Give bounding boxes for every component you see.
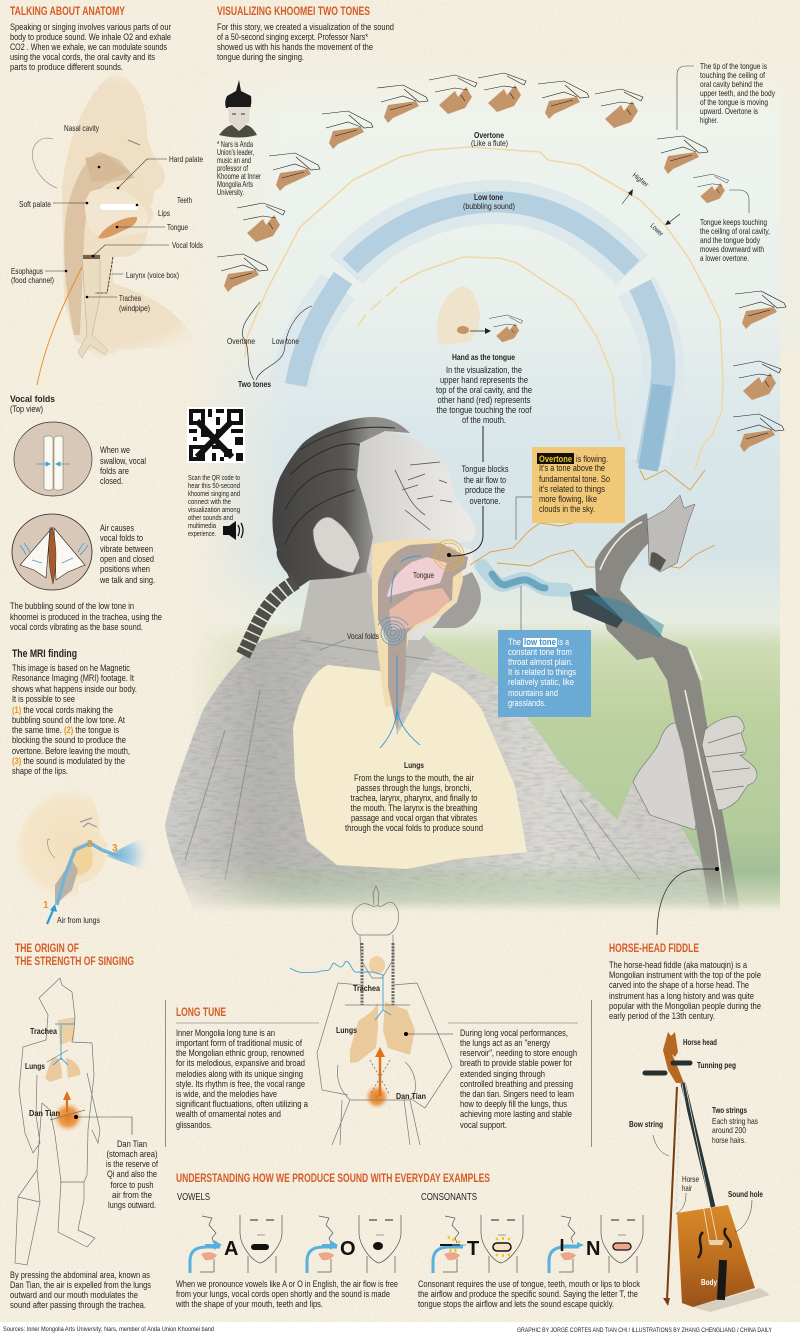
consonants subheading: CONSONANTS <box>421 1192 477 1203</box>
orange pointer to vocal folds <box>37 267 82 385</box>
MRI labels: Air from lungs <box>57 915 100 925</box>
higher / lower markers: Higher <box>631 172 650 189</box>
icon: letter O: O <box>340 1238 356 1260</box>
panel: low tone: low tone <box>524 637 556 648</box>
open text: vibrate between <box>100 544 153 555</box>
MRI text: (3) the sound is modulated by the <box>12 756 125 767</box>
section: the MRI finding <box>12 648 150 925</box>
icon: speaker <box>223 521 243 540</box>
labels inside cutaway: Tongue <box>413 570 434 580</box>
QR code <box>187 407 245 463</box>
footnote on Nars: University. <box>217 187 244 197</box>
lungs text <box>345 760 483 834</box>
intro text <box>217 22 394 63</box>
callout: tongue tip: and the tongue body <box>700 235 761 245</box>
fiddle text: carved into the shape of a horse head. The <box>609 980 749 991</box>
fiddle shaft <box>595 513 740 910</box>
anatomy labels and leader lines: Nasal cavity <box>64 123 100 133</box>
callout: tongue tip: oral cavity behind the <box>700 79 763 89</box>
vowels text: When we pronounce vowels like A or O in English, the air flow is free <box>176 1279 398 1290</box>
QR code block <box>187 407 245 540</box>
icon: letter N: N <box>586 1238 600 1260</box>
MRI text: bubbling sound of the low tone. At <box>12 715 125 726</box>
panel: low tone: relatively static, like <box>508 677 574 688</box>
panel: low tone: constant tone from <box>508 647 572 658</box>
panel: overtone: it's related to things <box>539 484 605 495</box>
long tune right text <box>460 1028 577 1131</box>
heading: (Top view) <box>10 404 43 415</box>
long tune right text: controlled breathing and pressing <box>460 1079 573 1090</box>
tongue blocks text: overtone. <box>470 496 500 507</box>
hand as the tongue: other hand (red) represents <box>438 395 531 406</box>
MRI text: blocking the sound to produce the <box>12 735 126 746</box>
footnote on Nars: music an and <box>217 155 251 165</box>
fiddle labels: around 200 <box>712 1125 746 1135</box>
section: long tune <box>166 886 592 1147</box>
fiddle text: instrument has a long history and was quite <box>609 991 754 1002</box>
overtone flow lines <box>470 470 715 568</box>
outer and inner overtone arcs <box>245 147 723 470</box>
throat cutaway <box>372 539 468 748</box>
ear <box>313 517 360 573</box>
figure labels: Trachea <box>353 983 380 993</box>
shaft highlight <box>600 522 725 905</box>
figure labels: Dan Tian <box>396 1091 426 1101</box>
footnote on Nars: Union's leader, <box>217 147 254 157</box>
heading and rules: LONG TUNE <box>176 1007 226 1019</box>
horse-head fiddle neck in illustration <box>570 495 757 910</box>
leaders for colored boxes <box>516 497 532 632</box>
hand as the tongue: of the mouth. <box>462 415 506 426</box>
tongue blocks text: Tongue blocks <box>462 464 509 475</box>
figure labels: Dan Tian <box>29 1108 60 1118</box>
vocal fold vibration rings <box>378 617 408 645</box>
closed text: When we <box>100 445 130 456</box>
callout: tongue tip: higher. <box>700 115 718 125</box>
open text: Air causes <box>100 523 134 534</box>
heading: TALKING ABOUT ANATOMY <box>10 6 125 18</box>
MRI labels: 1 <box>43 900 49 911</box>
heading: Vocal folds <box>10 394 55 405</box>
panel: overtone: It's a tone above the <box>539 463 605 474</box>
heading: UNDERSTANDING HOW WE PRODUCE SOUND WITH EVERYDAY EXAMPLES <box>176 1173 490 1185</box>
pressing text: Dan Tian, the air is expelled from the lungs <box>10 1280 151 1291</box>
open vocal folds diagram <box>12 514 92 590</box>
labels inside cutaway: Vocal folds <box>347 631 379 641</box>
anatomy labels and leader lines: Teeth <box>177 195 192 205</box>
standing figure <box>15 978 132 1265</box>
open text <box>99 523 155 586</box>
intro text: parts to produce different sounds. <box>10 62 123 73</box>
hand as the tongue <box>436 287 532 426</box>
fiddle pointer <box>657 869 717 935</box>
hand as the tongue: the tongue touching the roof <box>436 405 532 416</box>
tongue blocks text: the air flow to <box>464 475 506 486</box>
closed text: swallow, vocal <box>100 456 146 467</box>
low tone flow <box>482 566 566 590</box>
panel: low tone: It is related to things <box>508 667 576 678</box>
heading: The MRI finding <box>12 648 77 660</box>
callout: tongue tip: touching the ceiling of <box>700 70 766 80</box>
body <box>677 1205 755 1307</box>
footnote on Nars: professor of <box>217 163 248 173</box>
portrait of Nars <box>219 80 257 138</box>
panel: low tone: grasslands. <box>508 698 546 709</box>
intro text: For this story, we created a visualization of the sound <box>217 22 394 33</box>
pressing text: sound after passing through the trachea. <box>10 1300 146 1311</box>
hand as the tongue: In the visualization, the <box>446 365 522 376</box>
bubbling text <box>10 601 162 633</box>
dan tian text: Qi and also the <box>107 1169 157 1180</box>
dan tian text: Dan Tian <box>117 1139 147 1150</box>
anatomy labels and leader lines: (food channel) <box>11 275 54 285</box>
intro text: of a 50-second singing excerpt. Professor Nars* <box>217 32 368 43</box>
long tune left text: melodies along with its unique singing <box>176 1069 303 1080</box>
hair <box>272 417 410 590</box>
fiddle labels: Each string has <box>712 1116 758 1126</box>
MRI text: (1) the vocal cords making the <box>12 705 113 716</box>
vowels text <box>175 1279 398 1310</box>
pointers <box>653 1135 752 1232</box>
closed vocal folds diagram <box>14 422 92 496</box>
intro text: Speaking or singing involves various parts of our <box>10 22 172 33</box>
closed text <box>100 445 146 487</box>
figure labels: Lungs <box>336 1025 357 1035</box>
MRI text <box>12 663 137 777</box>
overtone and low tone labels: (Like a flute) <box>471 138 508 148</box>
panel: low tone: throat almost plain. <box>508 657 573 668</box>
low tone arc <box>290 202 663 470</box>
sources: Sources: Inner Mongolia Arts University; Nars, member of Anda Union Khoomei band <box>3 1326 214 1333</box>
fiddle shadow <box>693 1288 770 1312</box>
heading <box>15 943 134 968</box>
QR caption: other sounds and <box>188 513 233 522</box>
central figure <box>290 886 453 1145</box>
dan tian text <box>106 1139 158 1211</box>
footer strip <box>0 1322 800 1334</box>
anatomy labels and leader lines: Tongue <box>167 222 188 232</box>
face <box>357 430 481 640</box>
long tune left text: important form of traditional music of <box>176 1038 302 1049</box>
fiddle labels: Bow string <box>629 1119 663 1129</box>
panel: overtone: more flowing, like <box>539 494 597 505</box>
long tune left text: for its melodious, expansive and broad <box>176 1058 305 1069</box>
panel: overtone: is flowing. <box>576 454 608 465</box>
lungs text: passes through the lungs, bronchi, <box>356 783 472 794</box>
section: vocal folds <box>10 394 162 633</box>
open text: vocal folds to <box>100 533 143 544</box>
QR caption <box>188 473 240 538</box>
figure labels <box>336 983 426 1101</box>
consonants text: the airflow and produce the specific sound. Saying the letter T, the <box>418 1289 638 1300</box>
fiddle text: The horse-head fiddle (aka matouqin) is a <box>609 960 748 971</box>
callout: tongue tip: of the tongue is moving <box>700 97 768 107</box>
sound holes, bridge and tailpiece <box>698 1228 731 1258</box>
horse head <box>647 495 695 572</box>
anatomy labels and leader lines <box>11 123 203 313</box>
figure labels: Trachea <box>30 1026 57 1036</box>
lungs text: trachea, larynx, pharynx, and finally to <box>350 793 478 804</box>
lungs text: From the lungs to the mouth, the air <box>354 773 475 784</box>
intro text <box>10 22 172 73</box>
intro text: tongue during the singing. <box>217 52 304 63</box>
MRI labels <box>43 839 118 925</box>
overtone and low tone labels <box>463 130 515 211</box>
long tune right text: how to deeply fill the lungs, thus <box>460 1099 567 1110</box>
open text: we talk and sing. <box>99 575 155 586</box>
icon: letter T: T <box>467 1238 479 1260</box>
anatomy head illustration <box>32 74 198 360</box>
panel: low tone: mountains and <box>508 688 558 699</box>
callout: tongue tip <box>677 61 776 263</box>
consonants text: Consonant requires the use of tongue, teeth, mouth or lips to block <box>418 1279 640 1290</box>
fiddle labels: Two strings <box>712 1105 747 1115</box>
panel: low tone <box>498 630 591 717</box>
anatomy labels and leader lines: Hard palate <box>169 154 203 164</box>
callout: tongue tip: the ceiling of oral cavity, <box>700 226 770 236</box>
bubbling text: khoomei is produced in the trachea, using the <box>10 612 162 623</box>
panel: low tone: is a <box>558 637 569 648</box>
intro text: CO2 . When we exhale, we can modulate sounds <box>10 42 167 53</box>
labels inside cutaway <box>347 570 434 641</box>
overtone vibration rings <box>434 540 464 570</box>
long tune right text: breath to provide stable power for <box>460 1058 573 1069</box>
tongue <box>387 557 447 597</box>
callout: tongue tip: The tip of the tongue is <box>700 61 767 71</box>
long tune right text: vocal support. <box>460 1120 507 1131</box>
footnote on Nars: Mongolia Arts <box>217 179 253 189</box>
hand as the tongue: upper hand represents the <box>440 375 528 386</box>
QR caption: visualization among <box>188 505 240 514</box>
icon: letter N <box>549 1215 643 1273</box>
higher / lower markers <box>622 172 680 238</box>
heading <box>10 394 55 415</box>
overtone and low tone labels: Overtone <box>474 130 504 140</box>
long tune left text: the Mongolian ethnic group, renowned <box>176 1048 304 1059</box>
panel: overtone: Overtone <box>539 454 572 465</box>
anatomy labels and leader lines: Lips <box>158 208 170 218</box>
fiddle labels: Body <box>701 1277 717 1287</box>
hand as the tongue: top of the oral cavity, and the <box>436 385 532 396</box>
heading and rules <box>166 1000 592 1147</box>
vowels text: from your lungs, vocal cords open shortly and the sound is made <box>176 1289 390 1300</box>
pressing text: outward and our mouth modulates the <box>10 1290 138 1301</box>
footnote on Nars: Khoome at Inner <box>217 171 261 181</box>
closed text: folds are <box>100 466 129 477</box>
lungs text: passage and vocal organ that vibrates <box>351 813 477 824</box>
coat fold shading <box>185 640 640 880</box>
long tune right text: the dan tian. Singers need to learn <box>460 1089 574 1100</box>
callout: tongue tip: Tongue keeps touching <box>700 217 767 227</box>
pressing text: By pressing the abdominal area, known as <box>10 1270 150 1281</box>
fiddle labels: Horse head <box>683 1037 717 1047</box>
section: understanding how we produce sound <box>175 1173 643 1310</box>
fiddle labels: horse hairs. <box>712 1135 746 1145</box>
callout: tongue tip: a lower overtone. <box>700 253 749 263</box>
heading: HORSE-HEAD FIDDLE <box>609 943 699 955</box>
sky and grassland backdrop <box>170 50 800 915</box>
fiddle text <box>609 960 761 1022</box>
bubbling text: vocal cords vibrating as the base sound. <box>10 622 143 633</box>
fiddle labels: hair <box>682 1183 692 1193</box>
pegs <box>645 1063 690 1073</box>
higher / lower markers: Lower <box>649 222 665 238</box>
fiddle text: early period of the 13th century. <box>609 1011 715 1022</box>
open text: positions when <box>100 564 150 575</box>
fingers <box>702 717 757 810</box>
icon: letter T <box>433 1215 523 1273</box>
tongue blocks text: produce the <box>465 485 505 496</box>
two tones callout: Overtone <box>227 336 255 346</box>
icon: letter O <box>307 1215 401 1273</box>
lungs text: Lungs <box>404 760 424 770</box>
fiddle labels: Sound hole <box>728 1189 763 1199</box>
long tune left text: wealth of ornamental notes and <box>175 1109 281 1120</box>
two tones callout: Two tones <box>238 379 271 389</box>
MRI text: overtone. Before leaving the mouth, <box>12 746 130 757</box>
fiddle labels: Horse <box>682 1174 699 1184</box>
fiddle text: Mongolian instrument with the top of the pole <box>609 970 761 981</box>
long tune right text: extended singing through <box>460 1069 545 1080</box>
dan tian text: is the reserve of <box>106 1159 158 1170</box>
neck <box>300 540 436 690</box>
QR caption: experience. <box>188 529 216 538</box>
fiddle illustration <box>645 1032 770 1312</box>
anatomy labels and leader lines: Trachea <box>119 293 141 303</box>
head <box>663 1032 684 1083</box>
overtone and low tone labels: Low tone <box>474 192 503 202</box>
vowels text: with the shape of your mouth, teeth and lips. <box>175 1299 323 1310</box>
anatomy labels and leader lines: Vocal folds <box>172 240 203 250</box>
MRI text: This image is based on he Magnetic <box>12 663 130 674</box>
MRI text: the same time. (2) the tongue is <box>12 725 119 736</box>
MRI head illustration <box>15 789 150 924</box>
section: horse-head fiddle <box>609 943 770 1312</box>
dark block <box>570 588 623 628</box>
anatomy labels and leader lines: Esophagus <box>11 266 43 276</box>
long tune right text: the lungs act as an "energy <box>460 1038 550 1049</box>
fiddle text: popular with the Mongolian people during the <box>609 1001 761 1012</box>
QR caption: hear this 50-second <box>188 481 240 490</box>
vowels subheading: VOWELS <box>177 1192 210 1203</box>
intro text: using the vocal cords, the oral cavity and its <box>10 52 155 63</box>
footnote on Nars <box>217 139 261 197</box>
icon: letter A <box>190 1215 282 1273</box>
heading: THE ORIGIN OF <box>15 943 79 955</box>
QR caption: connect with the <box>188 497 231 506</box>
hair strands <box>285 427 395 545</box>
overtone and low tone labels: (bubbling sound) <box>463 201 515 211</box>
two tones callout: Low tone <box>272 336 299 346</box>
long tune left text: significant fluctuations, often utilizing a <box>176 1099 309 1110</box>
panel: overtone <box>532 447 625 523</box>
long tune left text: glissandos. <box>176 1120 212 1131</box>
air flow arrows <box>380 556 421 748</box>
figure labels <box>25 1026 60 1118</box>
QR caption: Scan the QR code to <box>188 473 240 482</box>
panel: overtone: fundamental tone. So <box>539 474 610 485</box>
MRI text: shape of the lips. <box>12 766 68 777</box>
thumb and cuff <box>633 723 700 830</box>
section: origin of the strength of singing <box>10 943 158 1311</box>
panel: low tone: The <box>508 637 521 648</box>
lungs overlay <box>293 665 527 869</box>
footnote on Nars: * Nars is Anda <box>217 139 253 149</box>
braid <box>243 582 296 655</box>
callout: tongue tip: upward. Overtone is <box>700 106 758 116</box>
closed text: closed. <box>100 476 123 487</box>
long tune right text: During long vocal performances, <box>460 1028 568 1039</box>
neck <box>683 1083 713 1207</box>
section: visualizing khoomei two tones <box>217 6 786 470</box>
beard <box>432 572 481 628</box>
section: talking about anatomy <box>10 6 203 385</box>
fiddle labels <box>629 1037 763 1287</box>
panel: overtone: clouds in the sky. <box>539 504 595 515</box>
long tune left text <box>175 1028 309 1131</box>
callout: tongue tip: moves downward with <box>700 244 764 254</box>
anatomy labels and leader lines: (windpipe) <box>119 303 150 313</box>
anatomy labels and leader lines: Larynx (voice box) <box>126 270 179 280</box>
tongue blocks text <box>462 464 509 507</box>
two tones callout <box>227 302 312 389</box>
eye and wrinkles <box>395 462 452 530</box>
hand as the tongue: Hand as the tongue <box>452 352 515 362</box>
MRI labels: 2 <box>87 839 93 850</box>
figure labels: Lungs <box>25 1061 45 1071</box>
MRI labels: 3 <box>112 843 118 854</box>
consonants text: tongue stops the airflow and lets the sound escape quickly. <box>418 1299 614 1310</box>
heading: THE STRENGTH OF SINGING <box>15 956 134 968</box>
QR caption: multimedia <box>188 521 217 530</box>
fiddle labels: Tunning peg <box>697 1060 736 1070</box>
callout: tongue tip: upper teeth, and the body <box>700 88 776 98</box>
MRI text: It is possible to see <box>12 694 75 705</box>
long tune left text: style. Its rhythm is free, the vocal range <box>176 1079 305 1090</box>
MRI text: shows what happens inside our body. <box>12 684 137 695</box>
bow <box>667 1087 677 1300</box>
QR caption: khoomei singing and <box>188 489 240 498</box>
long tune left text: Inner Mongolia long tune is an <box>176 1028 275 1039</box>
bubbling text: The bubbling sound of the low tone in <box>10 601 134 612</box>
consonants text <box>418 1279 640 1310</box>
icon: letter A: A <box>224 1238 238 1260</box>
long tune right text: reservoir", needing to store enough <box>460 1048 577 1059</box>
hand gestures around the arc <box>217 73 786 452</box>
pressing text <box>10 1270 151 1311</box>
MRI text: Resonance Imaging (MRI) footage. It <box>12 673 134 684</box>
open text: open and closed <box>100 554 154 565</box>
coat and body <box>165 630 710 906</box>
leader: hand as the tongue to tongue blocks <box>449 426 483 556</box>
intro text: showed us with his hands the movement of the <box>217 42 373 53</box>
dan tian text: force to push <box>110 1180 154 1191</box>
intro text: body to produce sound. We inhale O2 and exhale <box>10 32 171 43</box>
long tune left text: is wide, and the melodies have <box>176 1089 277 1100</box>
singer illustration <box>165 417 725 915</box>
anatomy labels and leader lines: Soft palate <box>19 199 51 209</box>
dan tian text: air from the <box>112 1190 152 1201</box>
dan tian text: (stomach area) <box>106 1149 158 1160</box>
dan tian text: lungs outward. <box>108 1200 156 1211</box>
lungs text: through the vocal folds to produce sound <box>345 823 483 834</box>
long tune right text: achieving more lasting and stable <box>460 1109 572 1120</box>
heading: VISUALIZING KHOOMEI TWO TONES <box>217 6 370 18</box>
lungs text: the mouth. The larynx is the breathing <box>350 803 478 814</box>
